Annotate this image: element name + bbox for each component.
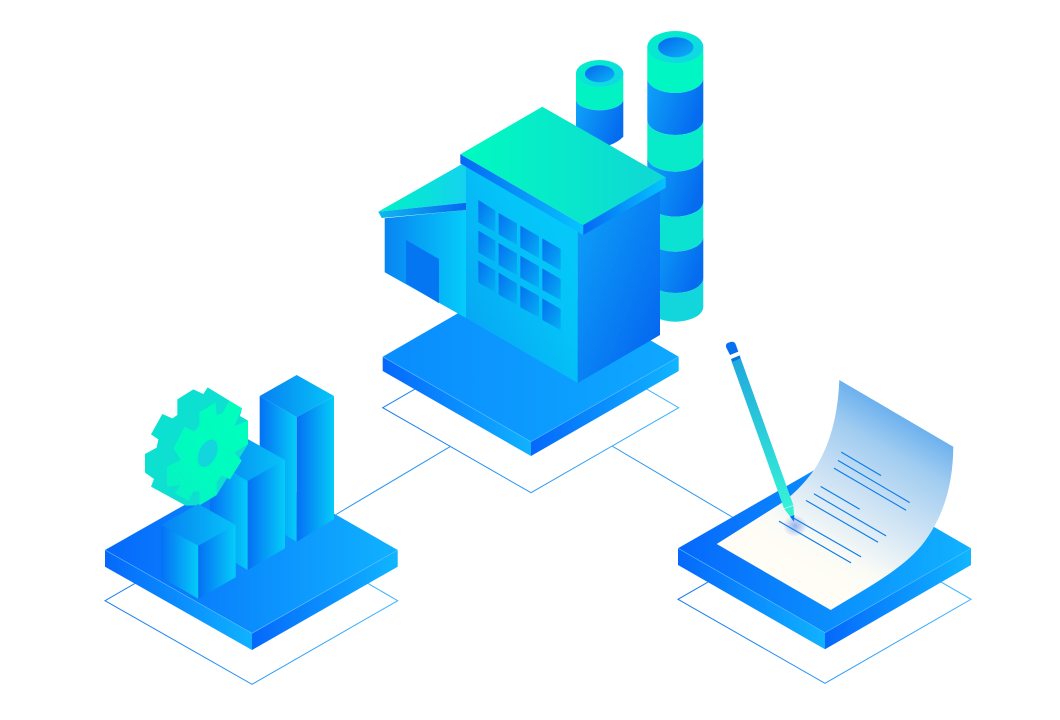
- curled paper sheet: [717, 380, 953, 610]
- pen nib: [784, 506, 794, 517]
- pen cap: [726, 342, 738, 355]
- chart platform outline: [105, 516, 398, 684]
- factory group: [378, 31, 703, 493]
- pen body: [732, 358, 793, 508]
- gear hole: [194, 436, 222, 470]
- main building side wall: [578, 180, 660, 383]
- main building front wall: [466, 160, 578, 383]
- tall bar: [260, 375, 334, 542]
- short chimney: [576, 60, 623, 150]
- pen band: [731, 355, 741, 362]
- annex door: [406, 240, 439, 303]
- medium bar: [210, 439, 285, 570]
- connector: factory to document platform: [612, 446, 733, 518]
- short bar: [161, 504, 236, 599]
- gear back face: [145, 387, 248, 506]
- factory windows: [478, 200, 561, 330]
- annex roof: [378, 164, 466, 212]
- factory platform: [383, 271, 679, 456]
- annex roof edge: [378, 203, 466, 218]
- connector: factory to chart platform: [336, 447, 450, 514]
- chart platform: [105, 467, 398, 650]
- factory platform outline: [383, 322, 679, 493]
- written lines on paper: [779, 452, 909, 563]
- gear front face: [167, 401, 248, 505]
- pen tip: [790, 515, 794, 522]
- annex building: [378, 164, 466, 318]
- document platform: [678, 464, 971, 649]
- gear: [145, 387, 248, 506]
- main roof: [460, 107, 666, 235]
- pen: [726, 342, 794, 522]
- tall chimney: [647, 31, 703, 322]
- pen shadow: [783, 515, 807, 537]
- document platform outline: [678, 515, 971, 683]
- document group: [678, 342, 971, 683]
- chart group: [105, 375, 398, 684]
